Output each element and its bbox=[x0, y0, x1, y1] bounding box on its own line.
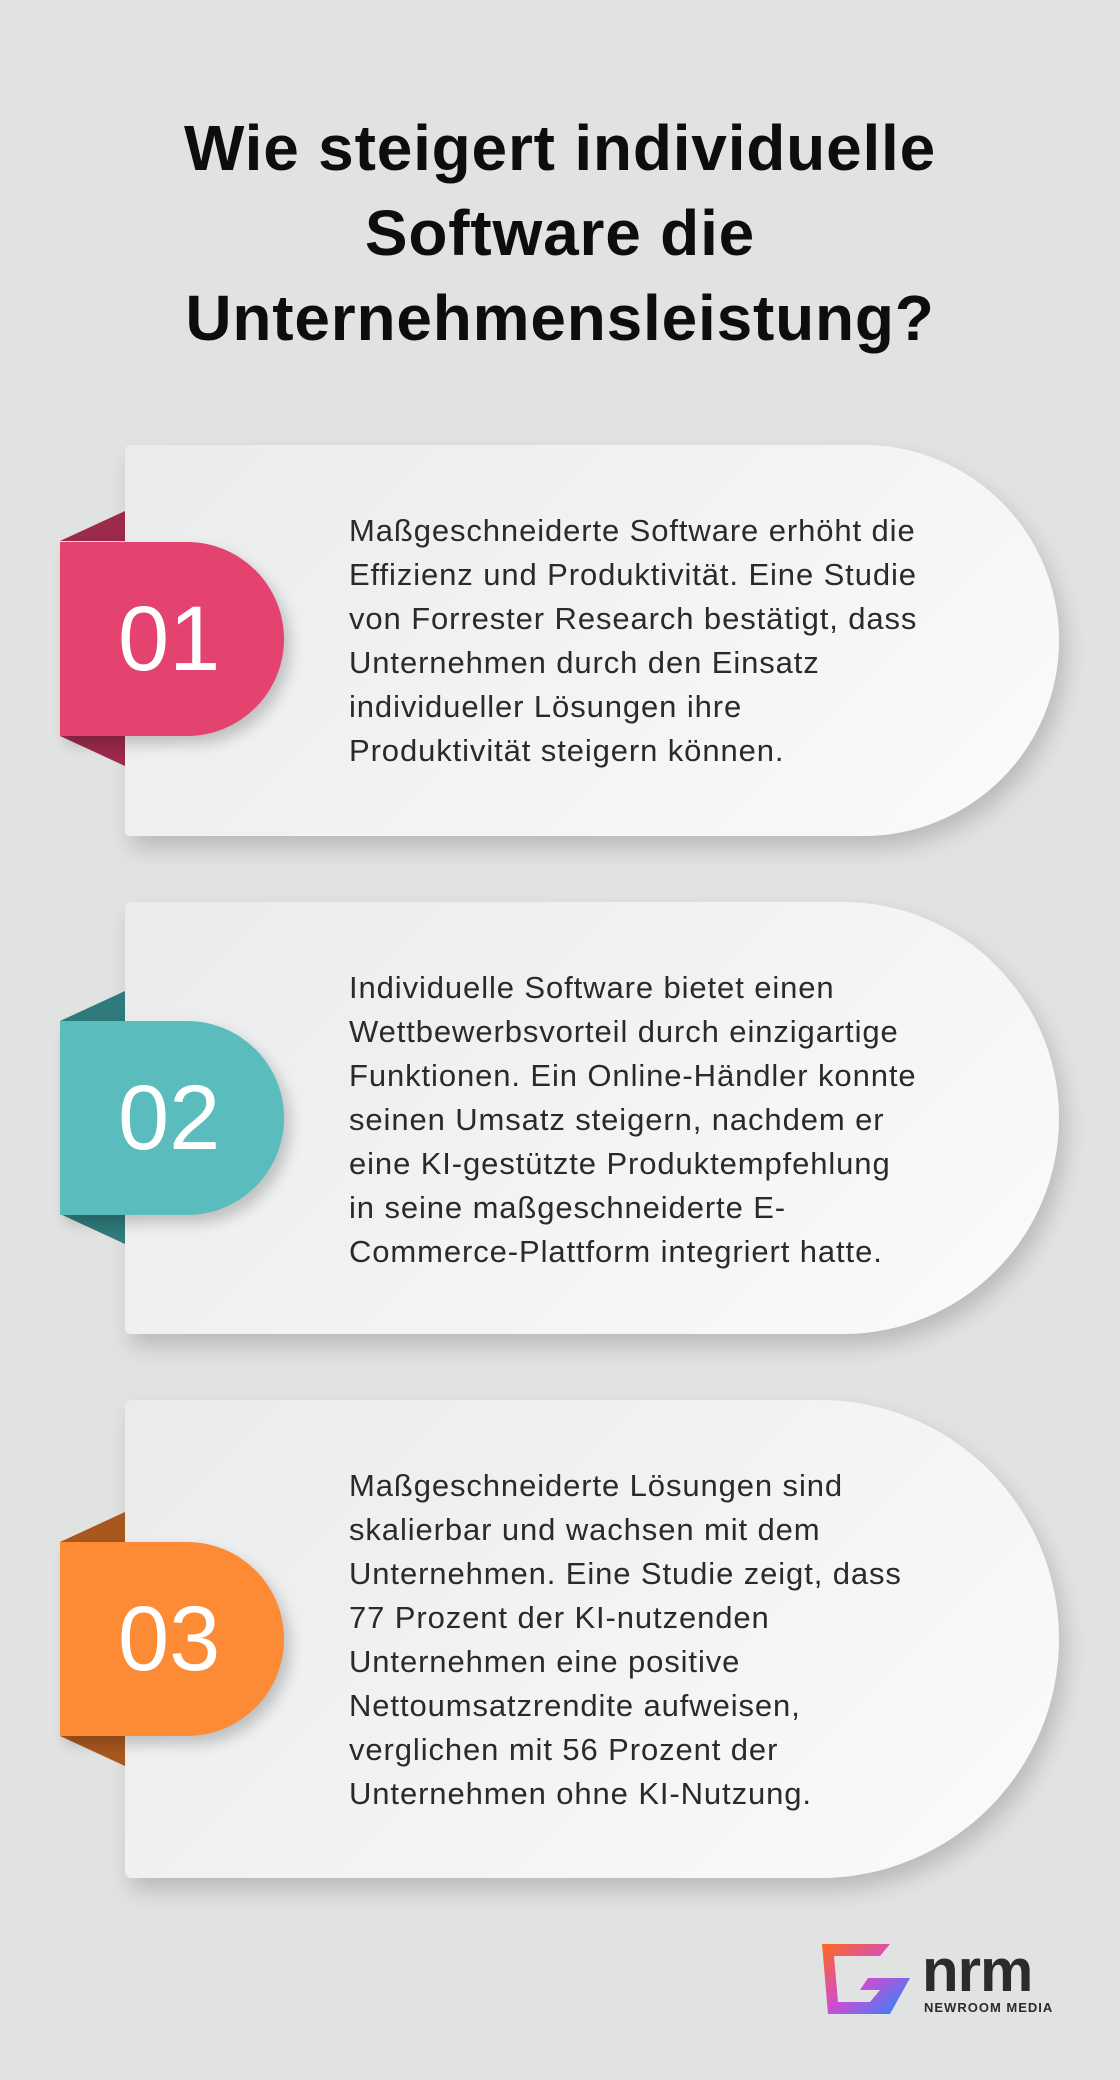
text block 1: Maßgeschneiderte Software erhöht die bbox=[349, 513, 916, 548]
text block 2: Commerce-Plattform integriert hatte. bbox=[349, 1234, 883, 1269]
text block 2: in seine maßgeschneiderte E- bbox=[349, 1190, 786, 1225]
text block 3: skalierbar und wachsen mit dem bbox=[349, 1512, 821, 1547]
icon: fold top 3 bbox=[60, 1512, 125, 1542]
badge 03: 03 bbox=[118, 1588, 220, 1690]
badge 03 bbox=[60, 1542, 284, 1736]
badge 01: 01 bbox=[118, 588, 220, 690]
text block 1: Unternehmen durch den Einsatz bbox=[349, 645, 820, 680]
text block 1: Effizienz und Produktivität. Eine Studie bbox=[349, 557, 917, 592]
icon: fold top 1 bbox=[60, 511, 125, 541]
text block 2: eine KI-gestützte Produktempfehlung bbox=[349, 1146, 891, 1181]
title bbox=[184, 112, 936, 354]
panel: card 2 bbox=[125, 902, 1059, 1334]
text block 3: Unternehmen ohne KI-Nutzung. bbox=[349, 1776, 812, 1811]
text block 3: Unternehmen eine positive bbox=[349, 1644, 740, 1679]
panel: card 1 bbox=[125, 445, 1059, 836]
text block 3: Unternehmen. Eine Studie zeigt, dass bbox=[349, 1556, 902, 1591]
title: Unternehmensleistung? bbox=[185, 282, 935, 354]
text block 1: individueller Lösungen ihre bbox=[349, 689, 742, 724]
text block 2: seinen Umsatz steigern, nachdem er bbox=[349, 1102, 884, 1137]
text block 1: von Forrester Research bestätigt, dass bbox=[349, 601, 917, 636]
badge 02 bbox=[60, 1021, 284, 1215]
text block 3 bbox=[349, 1468, 902, 1811]
text block 1 bbox=[349, 513, 917, 768]
badge 02: 02 bbox=[118, 1067, 220, 1169]
text block 2 bbox=[349, 970, 917, 1269]
icon: fold bottom 1 bbox=[60, 736, 125, 766]
logo: nrm bbox=[922, 1937, 1032, 2004]
badge 01 bbox=[60, 542, 284, 736]
text block 2: Wettbewerbsvorteil durch einzigartige bbox=[349, 1014, 899, 1049]
text block 3: Nettoumsatzrendite aufweisen, bbox=[349, 1688, 801, 1723]
icon: fold bottom 3 bbox=[60, 1736, 125, 1766]
text block 2: Funktionen. Ein Online-Händler konnte bbox=[349, 1058, 917, 1093]
icon: fold bottom 2 bbox=[62, 1215, 125, 1244]
logo bbox=[822, 1937, 1053, 2015]
title: Wie steigert individuelle bbox=[184, 112, 936, 184]
text block 1: Produktivität steigern können. bbox=[349, 733, 784, 768]
text block 2: Individuelle Software bietet einen bbox=[349, 970, 835, 1005]
text block 3: Maßgeschneiderte Lösungen sind bbox=[349, 1468, 843, 1503]
logo: NEWROOM MEDIA bbox=[924, 2000, 1053, 2015]
text block 3: verglichen mit 56 Prozent der bbox=[349, 1732, 778, 1767]
title: Software die bbox=[365, 197, 755, 269]
panel: card 3 bbox=[125, 1400, 1059, 1878]
text block 3: 77 Prozent der KI-nutzenden bbox=[349, 1600, 770, 1635]
icon: fold top 2 bbox=[60, 991, 125, 1021]
